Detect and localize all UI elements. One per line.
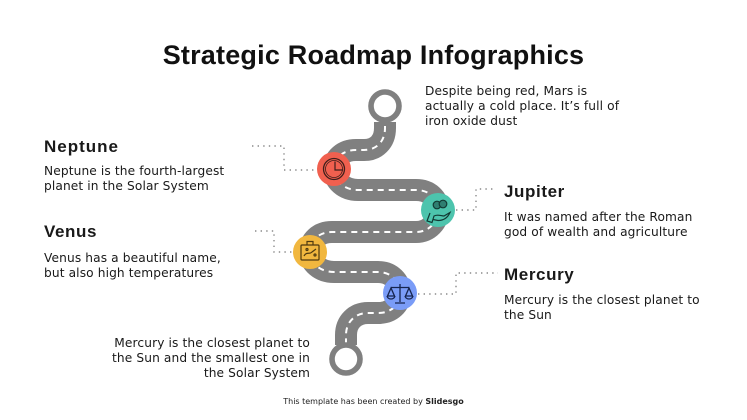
text: Venus description	[44, 250, 221, 280]
icon: map case on yellow marker	[293, 235, 327, 269]
text: Jupiter description: god of wealth and agriculture	[504, 225, 688, 239]
text: Jupiter description	[504, 210, 692, 239]
dotted connectors	[252, 146, 498, 294]
text: Jupiter description: It was named after the Roman	[504, 210, 692, 224]
footer credit: This template has been created by Slidesgo	[283, 397, 464, 406]
winding road	[310, 122, 438, 345]
icon: clock on red marker	[317, 152, 351, 186]
panel: Mercury	[504, 265, 700, 322]
text block: Mercury bottom: Mercury is the closest planet to	[114, 336, 310, 350]
text: Venus description: Venus has a beautiful name,	[44, 250, 221, 264]
panel: Neptune	[44, 137, 224, 193]
road end ring	[332, 345, 360, 373]
text block: Mars	[425, 84, 620, 128]
text: Neptune description: planet in the Solar System	[44, 179, 209, 193]
text: Mercury description: the Sun	[504, 308, 552, 322]
title: Strategic Roadmap Infographics	[163, 40, 584, 70]
heading: Jupiter: Jupiter	[504, 182, 565, 201]
icon: scales on blue marker	[383, 276, 417, 310]
panel: Jupiter	[504, 182, 692, 239]
text block: Mercury bottom: the Sun and the smallest one in	[112, 351, 310, 365]
text: Venus description: but also high temperatures	[44, 266, 213, 280]
heading: Mercury: Mercury	[504, 265, 574, 284]
icon: hand with coins on teal marker	[421, 193, 455, 227]
text: Mercury description: Mercury is the closest planet to	[504, 292, 700, 306]
text: Mercury description	[504, 292, 700, 322]
text block: Mercury bottom	[112, 336, 310, 380]
text block: Mercury bottom: the Solar System	[204, 366, 310, 380]
text: Neptune description	[44, 164, 224, 193]
heading: Neptune: Neptune	[44, 137, 119, 156]
panel: Venus	[44, 222, 221, 280]
text block: Mars: Despite being red, Mars is	[425, 84, 587, 98]
text block: Mars: actually a cold place. It’s full of	[425, 99, 619, 113]
heading: Venus: Venus	[44, 222, 97, 241]
text: Neptune description: Neptune is the fourth-largest	[44, 164, 224, 178]
road start ring	[371, 92, 399, 120]
text block: Mars: iron oxide dust	[425, 114, 517, 128]
